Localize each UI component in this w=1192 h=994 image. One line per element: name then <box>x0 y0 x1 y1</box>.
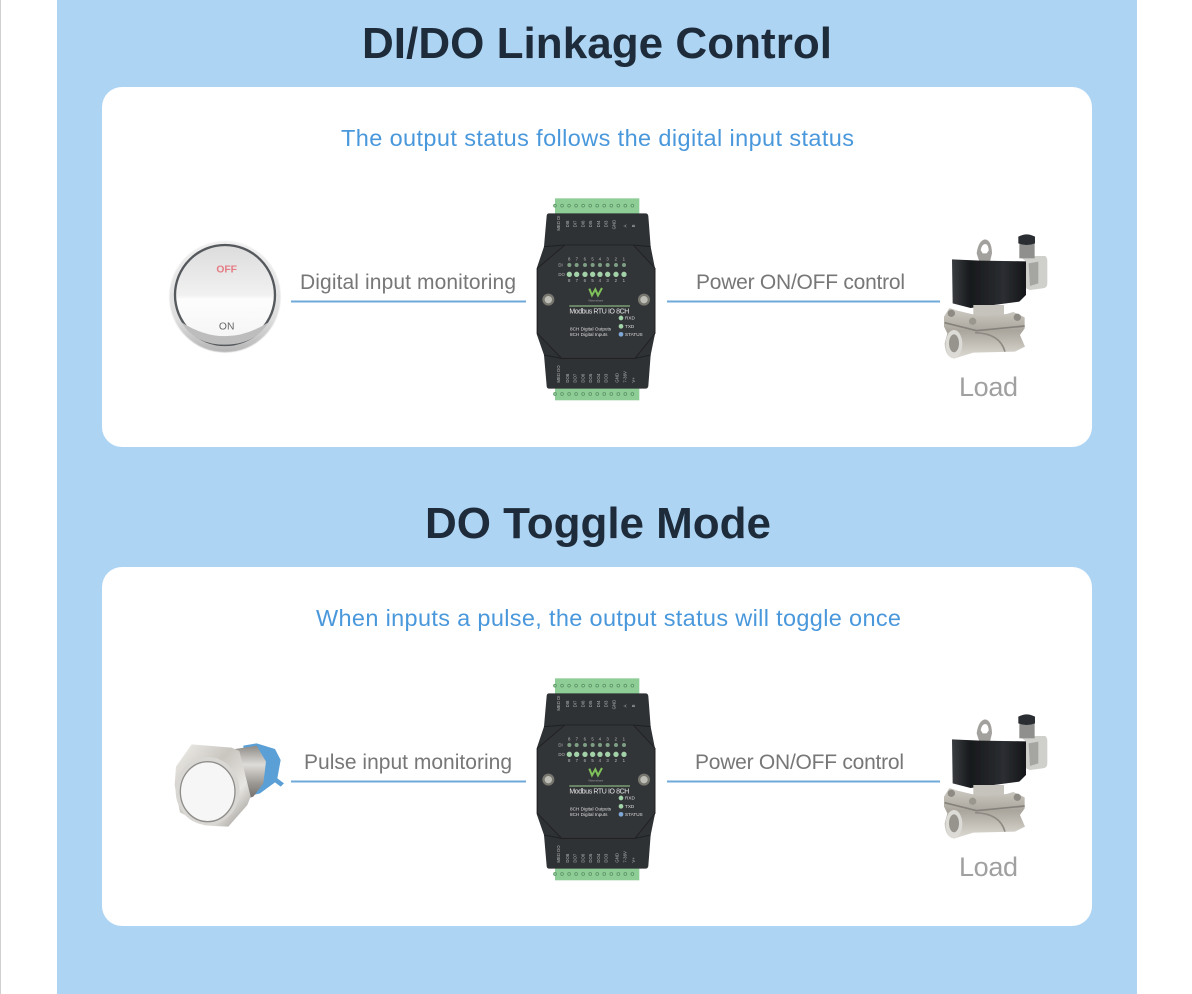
icon: Modbus RTU IO module: DI6 <box>580 220 585 227</box>
icon: Modbus RTU IO module: 2 <box>615 736 618 741</box>
icon: Modbus RTU IO module: 8 <box>568 736 571 741</box>
arrow line: module to load <box>667 300 940 302</box>
icon: rotary switch <box>169 241 281 352</box>
icon: Modbus RTU IO module: STATUS <box>625 332 643 337</box>
icon: Modbus RTU IO module: DI8 <box>565 220 570 227</box>
icon: Modbus RTU IO module: MED DI <box>556 696 561 711</box>
icon: Modbus RTU IO module: 2 <box>615 256 618 261</box>
label: power on/off control: Power ON/OFF control <box>696 271 905 294</box>
icon: Modbus RTU IO module: DI <box>558 743 563 748</box>
icon: Modbus RTU IO module: RXD <box>625 796 635 801</box>
icon: Modbus RTU IO module: 6 <box>584 278 587 283</box>
icon: Modbus RTU IO module: 7-36V <box>623 851 628 863</box>
icon: Modbus RTU IO module: GND <box>614 373 619 383</box>
icon: Modbus RTU IO module: 7 <box>576 278 579 283</box>
icon: Modbus RTU IO module: DO5 <box>588 853 593 863</box>
icon: Modbus RTU IO module: DO3 <box>604 853 609 863</box>
icon: Modbus RTU IO module: 2 <box>615 758 618 763</box>
icon: Modbus RTU IO module: Modbus RTU IO 8CH <box>569 788 629 795</box>
icon: Modbus RTU IO module: 8 <box>568 278 571 283</box>
icon: Modbus RTU IO module: V+ <box>631 857 636 863</box>
icon: Modbus RTU IO module: DI8 <box>565 700 570 707</box>
icon: metal push button <box>175 743 284 827</box>
icon: Modbus RTU IO module: V+ <box>631 377 636 383</box>
label: load: Load <box>959 852 1018 882</box>
icon: Modbus RTU IO module: DO <box>558 272 565 277</box>
icon: Modbus RTU IO module: DO3 <box>604 373 609 383</box>
icon: Modbus RTU IO module: 1 <box>623 758 626 763</box>
icon: Modbus RTU IO module <box>537 198 655 400</box>
icon: Modbus RTU IO module: DI7 <box>573 700 578 707</box>
icon: Modbus RTU IO module: 6 <box>584 758 587 763</box>
icon: Modbus RTU IO module: 3 <box>606 758 609 763</box>
subtitle: linkage description: The output status follows the digital input status <box>341 125 854 151</box>
icon: rotary switch: OFF <box>216 265 237 276</box>
icon: Modbus RTU IO module: 7 <box>576 256 579 261</box>
icon: Modbus RTU IO module: 4 <box>599 278 602 283</box>
icon: Modbus RTU IO module: DI5 <box>588 220 593 227</box>
icon: Modbus RTU IO module: 4 <box>599 256 602 261</box>
icon: Modbus RTU IO module: MED DI <box>556 216 561 231</box>
icon: Modbus RTU IO module: 6 <box>584 736 587 741</box>
icon: Modbus RTU IO module: MED DO <box>556 365 561 383</box>
label: power on/off control: Power ON/OFF control <box>695 751 904 774</box>
icon: Modbus RTU IO module: 1 <box>623 256 626 261</box>
icon: Modbus RTU IO module: 1 <box>623 278 626 283</box>
icon: Modbus RTU IO module: DI6 <box>580 700 585 707</box>
icon: Modbus RTU IO module: DO7 <box>573 853 578 863</box>
arrow line: input to module <box>291 780 526 782</box>
icon: Modbus RTU IO module: 8CH Digital Outputs <box>570 806 612 811</box>
icon: Modbus RTU IO module: 8 <box>568 256 571 261</box>
icon: Modbus RTU IO module: 5 <box>591 278 594 283</box>
icon: Modbus RTU IO module: Waveshare <box>588 299 604 303</box>
icon: Modbus RTU IO module: DI7 <box>573 220 578 227</box>
icon: Modbus RTU IO module: A <box>623 224 628 227</box>
icon: Modbus RTU IO module: 5 <box>591 256 594 261</box>
icon: Modbus RTU IO module: Waveshare <box>588 779 604 783</box>
icon: Modbus RTU IO module: GND <box>611 700 616 709</box>
icon: Modbus RTU IO module: B <box>631 704 636 707</box>
icon: Modbus RTU IO module: 7 <box>576 736 579 741</box>
icon: Modbus RTU IO module: Modbus RTU IO 8CH <box>569 308 629 315</box>
icon: Modbus RTU IO module: 7-36V <box>623 371 628 383</box>
icon: Modbus RTU IO module: DO6 <box>580 373 585 383</box>
icon: Modbus RTU IO module: DI5 <box>588 700 593 707</box>
icon: Modbus RTU IO module: 3 <box>606 278 609 283</box>
icon: Modbus RTU IO module: 8 <box>568 758 571 763</box>
icon: Modbus RTU IO module: 8CH Digital Inputs <box>570 812 608 817</box>
icon: Modbus RTU IO module: MED DO <box>556 845 561 863</box>
arrow line: input to module <box>291 300 526 302</box>
icon: Modbus RTU IO module: GND <box>614 853 619 863</box>
icon: rotary switch: ON <box>219 322 234 333</box>
subtitle: toggle description: When inputs a pulse, the output status will toggle once <box>316 605 901 631</box>
icon: Modbus RTU IO module: 4 <box>599 758 602 763</box>
icon: Modbus RTU IO module: 1 <box>623 736 626 741</box>
icon: Modbus RTU IO module: 8CH Digital Outputs <box>570 326 612 331</box>
icon: Modbus RTU IO module: 3 <box>606 256 609 261</box>
icon: Modbus RTU IO module: 6 <box>584 256 587 261</box>
icon: Modbus RTU IO module: DI <box>558 263 563 268</box>
icon: Modbus RTU IO module: 2 <box>615 278 618 283</box>
icon: Modbus RTU IO module: DO <box>558 752 565 757</box>
icon: Modbus RTU IO module: DO8 <box>565 373 570 383</box>
icon: Modbus RTU IO module: TXD <box>625 804 635 809</box>
label: pulse input monitoring: Pulse input monitoring <box>304 751 512 774</box>
icon: Modbus RTU IO module: 4 <box>599 736 602 741</box>
icon: Modbus RTU IO module: STATUS <box>625 812 643 817</box>
icon: Modbus RTU IO module: DO4 <box>596 373 601 383</box>
title: DO Toggle Mode: DO Toggle Mode <box>425 499 771 548</box>
icon: Modbus RTU IO module: DI4 <box>596 700 601 707</box>
title: DI/DO Linkage Control: DI/DO Linkage Control <box>362 19 832 68</box>
icon: Modbus RTU IO module: 5 <box>591 736 594 741</box>
icon: Modbus RTU IO module: TXD <box>625 324 635 329</box>
arrow line: module to load <box>667 780 940 782</box>
icon: Modbus RTU IO module: 7 <box>576 758 579 763</box>
icon: Modbus RTU IO module: DO7 <box>573 373 578 383</box>
icon: Modbus RTU IO module: DO5 <box>588 373 593 383</box>
icon: solenoid valve load <box>944 714 1047 839</box>
panel: DO toggle mode <box>102 567 1092 926</box>
icon: Modbus RTU IO module: A <box>623 704 628 707</box>
icon: Modbus RTU IO module <box>537 678 655 880</box>
icon: Modbus RTU IO module: B <box>631 224 636 227</box>
icon: Modbus RTU IO module: DI3 <box>604 220 609 227</box>
icon: Modbus RTU IO module: 3 <box>606 736 609 741</box>
icon: Modbus RTU IO module: DO6 <box>580 853 585 863</box>
icon: Modbus RTU IO module: DO8 <box>565 853 570 863</box>
icon: Modbus RTU IO module: DO4 <box>596 853 601 863</box>
label: load: Load <box>959 372 1018 402</box>
icon: Modbus RTU IO module: DI4 <box>596 220 601 227</box>
icon: Modbus RTU IO module: 5 <box>591 758 594 763</box>
icon: Modbus RTU IO module: DI3 <box>604 700 609 707</box>
icon: Modbus RTU IO module: GND <box>611 220 616 229</box>
panel: DI/DO linkage control <box>102 87 1092 447</box>
icon: Modbus RTU IO module: RXD <box>625 316 635 321</box>
icon: Modbus RTU IO module: 8CH Digital Inputs <box>570 332 608 337</box>
label: digital input monitoring: Digital input monitoring <box>300 271 516 294</box>
icon: solenoid valve load <box>944 234 1047 359</box>
